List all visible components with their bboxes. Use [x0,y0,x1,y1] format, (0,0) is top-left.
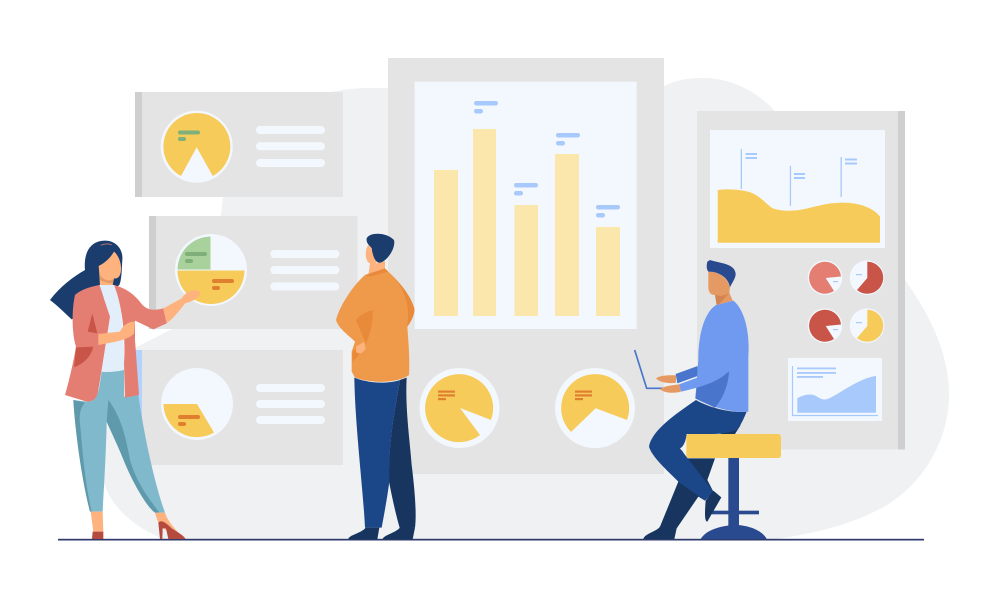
hair [367,234,394,263]
arms [98,290,201,345]
jacket [65,285,167,402]
background blob [102,78,949,540]
panel: right dashboard [697,111,905,450]
shoe [705,491,721,522]
hair [50,241,122,319]
shirt [99,285,124,372]
sweater shading [352,268,414,362]
stool [701,457,767,539]
legs and feet [91,512,180,535]
bar chart [434,101,620,316]
area chart with flags [710,130,885,248]
small pie: coral [808,260,842,295]
sweater shading [695,372,729,408]
shoes [348,528,415,539]
trousers [389,378,416,529]
neck shadow [715,293,729,305]
sweater [336,269,414,382]
figure: man standing [336,234,416,539]
panel: top left pie card [135,92,343,197]
near arm [679,371,729,392]
small pie: red [808,308,842,343]
laptop [635,350,665,388]
back arm [676,366,698,383]
ground line [58,539,924,540]
small area chart [788,358,882,421]
pants shading [73,400,159,513]
far leg [643,425,741,539]
shoes [92,521,186,539]
hand on hip [356,342,366,353]
panel: middle left pie card [149,216,358,329]
figure: man seated with laptop [635,260,781,539]
small pie: yellow [850,308,884,343]
panel: central dashboard [388,58,664,474]
face [708,272,733,305]
hair band [101,244,112,245]
hair [707,260,736,287]
pie chart: right [555,368,635,448]
near leg [354,378,400,528]
neck and face [366,245,385,275]
pants [73,370,165,513]
pie chart: left [420,368,500,448]
figure: woman presenting [50,241,201,539]
stool seat [686,434,781,458]
hands [656,375,681,393]
near leg [649,400,747,501]
panel: lower left pie card [135,350,343,465]
head and neck [99,252,121,295]
sweater [695,301,749,412]
small pie: red quarter [850,260,884,295]
jacket shading [74,313,97,367]
neck shadow [100,275,114,283]
